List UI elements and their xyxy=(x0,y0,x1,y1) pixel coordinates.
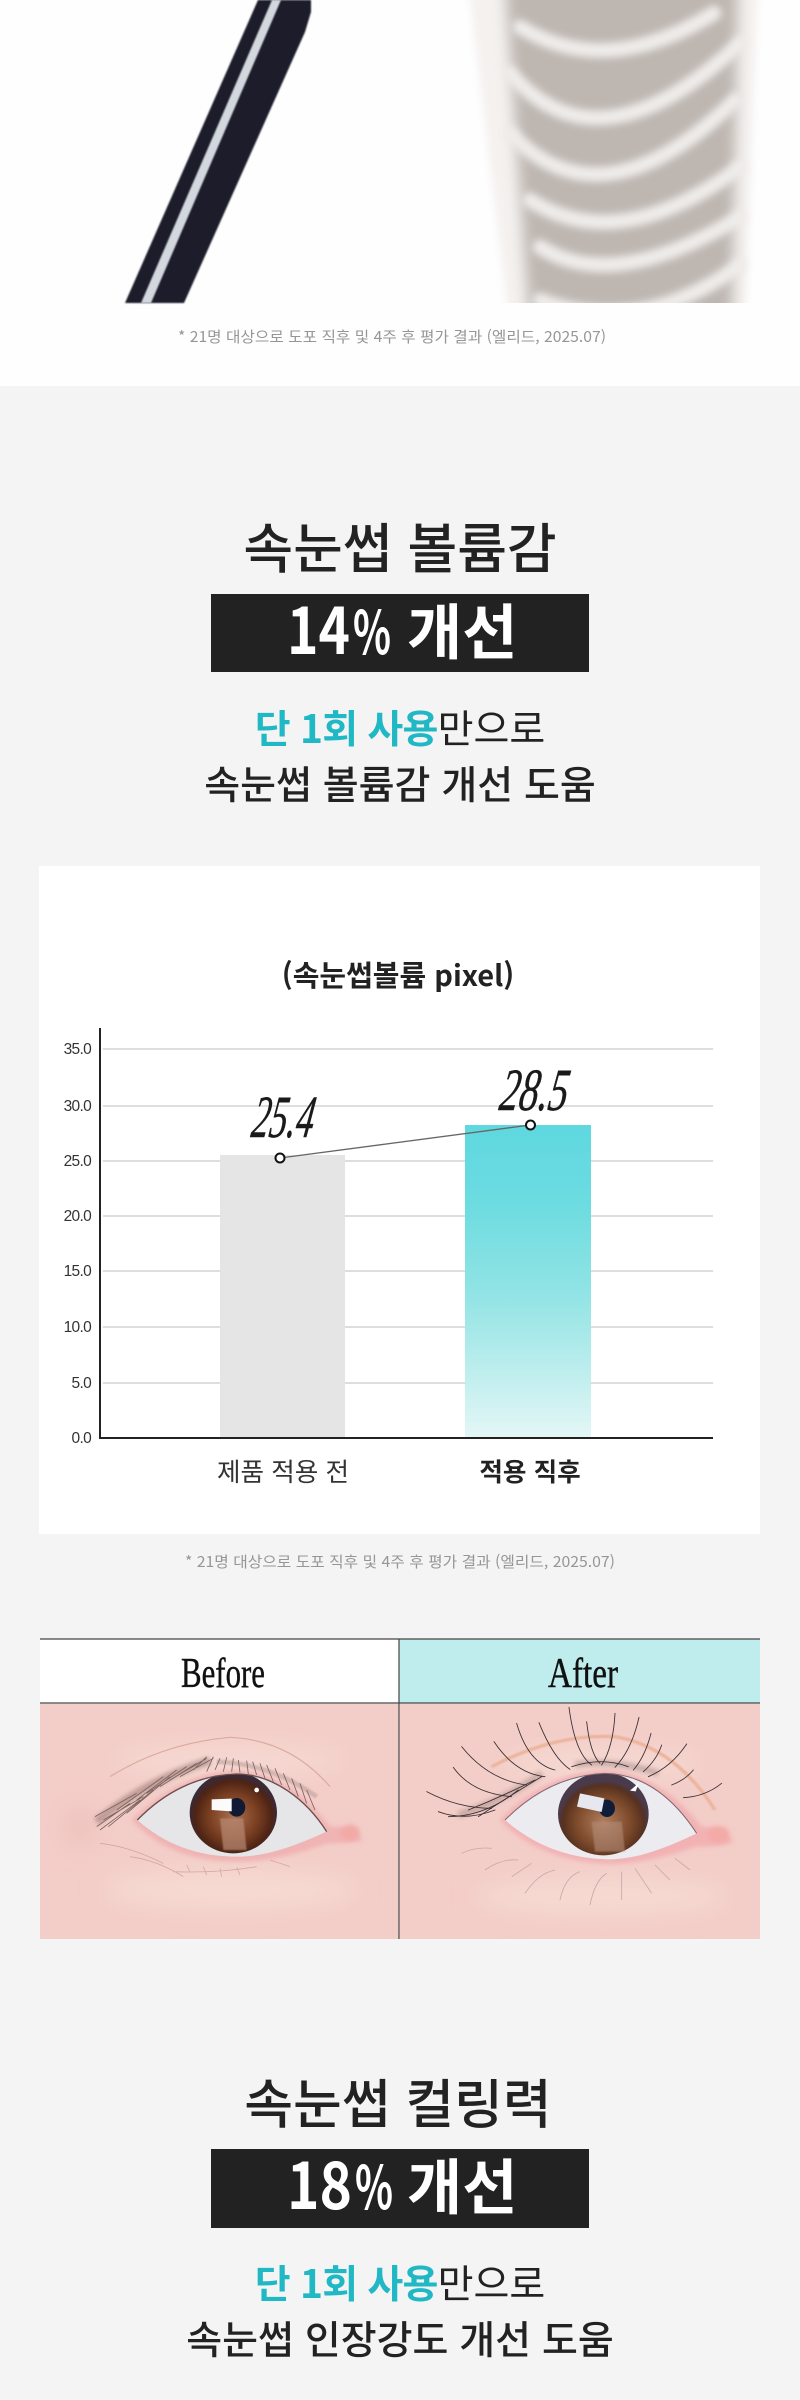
panel: before and after comparison xyxy=(40,1639,760,1939)
title: 속눈썹 컬링력 xyxy=(244,2063,552,2139)
y axis labels: 5.0 xyxy=(72,1375,92,1392)
y axis labels: 30.0 xyxy=(64,1098,92,1115)
eyeshadow crease xyxy=(492,1736,715,1810)
subtitle: 속눈썹 볼륨감 개선 도움 xyxy=(204,755,596,811)
lower lashes xyxy=(462,1848,690,1905)
bar: after xyxy=(465,1125,591,1438)
result banner xyxy=(211,2136,589,2228)
result banner: 개선 xyxy=(407,2140,517,2227)
tear duct xyxy=(707,1826,730,1843)
trend line xyxy=(276,1120,535,1162)
sclera xyxy=(137,1774,327,1857)
panel: product close-up xyxy=(0,0,800,386)
axes xyxy=(100,1028,713,1438)
result banner xyxy=(211,581,589,673)
y axis labels: 20.0 xyxy=(64,1208,92,1225)
curled upper lashes xyxy=(427,1707,722,1817)
icon: mascara wand handle xyxy=(125,0,311,303)
lash base shadow xyxy=(458,1763,658,1815)
result banner: 개선 xyxy=(407,585,517,672)
bar: before xyxy=(220,1155,345,1438)
table lines xyxy=(40,1639,760,1939)
section: lash volume heading xyxy=(204,505,596,811)
upper lid line xyxy=(505,1773,697,1833)
lower lashes xyxy=(100,1843,290,1877)
iris xyxy=(558,1773,649,1855)
upper short lashes xyxy=(97,1761,210,1822)
subtitle: 속눈썹 인장강도 개선 도움 xyxy=(186,2310,614,2366)
title: 속눈썹 볼륨감 xyxy=(243,505,557,584)
result banner: % xyxy=(355,2140,393,2227)
y axis labels: 35.0 xyxy=(64,1041,92,1058)
label: before: 제품 적용 전 xyxy=(217,1452,349,1489)
y axis labels xyxy=(64,1041,92,1447)
result banner: % xyxy=(353,585,391,672)
result banner: 14 xyxy=(287,581,350,673)
pupil and highlight xyxy=(599,1800,615,1817)
footnote: * 21명 대상으로 도포 직후 및 4주 후 평가 결과 (엘리드, 2025.07) xyxy=(178,326,606,347)
y axis labels: 15.0 xyxy=(64,1263,92,1280)
iris xyxy=(190,1772,277,1853)
panel: volume chart xyxy=(39,866,760,1534)
section: lash curl heading xyxy=(186,2063,614,2366)
lid rim xyxy=(132,1771,363,1862)
value: before: 25.4 xyxy=(248,1084,320,1151)
tear duct xyxy=(340,1825,360,1841)
pupil and highlight xyxy=(228,1798,245,1817)
icon: mascara bristle column xyxy=(468,0,758,330)
crease xyxy=(110,1737,330,1787)
bar chart xyxy=(64,1028,713,1489)
chart title: (속눈썹볼륨 pixel) xyxy=(282,953,514,995)
sclera xyxy=(505,1773,697,1859)
y axis labels: 25.0 xyxy=(64,1153,92,1170)
result banner: 18 xyxy=(287,2136,352,2228)
subtitle: 단 1회 사용만으로 xyxy=(255,2254,545,2310)
header: before xyxy=(40,1639,399,1703)
upper lid line xyxy=(137,1774,327,1832)
subtitle: 단 1회 사용만으로 xyxy=(255,699,545,755)
header: before: Before xyxy=(181,1651,265,1697)
header: after xyxy=(399,1639,760,1703)
y axis labels: 10.0 xyxy=(64,1319,92,1336)
label: after: 적용 직후 xyxy=(479,1452,581,1489)
photo: after eye xyxy=(400,1704,760,1939)
header: after: After xyxy=(548,1651,618,1697)
lid rim xyxy=(500,1770,733,1864)
value: after: 28.5 xyxy=(496,1057,574,1124)
photo: before eye xyxy=(40,1704,399,1939)
y axis labels: 0.0 xyxy=(72,1430,92,1447)
footnote: * 21명 대상으로 도포 직후 및 4주 후 평가 결과 (엘리드, 2025.07) xyxy=(185,1551,615,1572)
